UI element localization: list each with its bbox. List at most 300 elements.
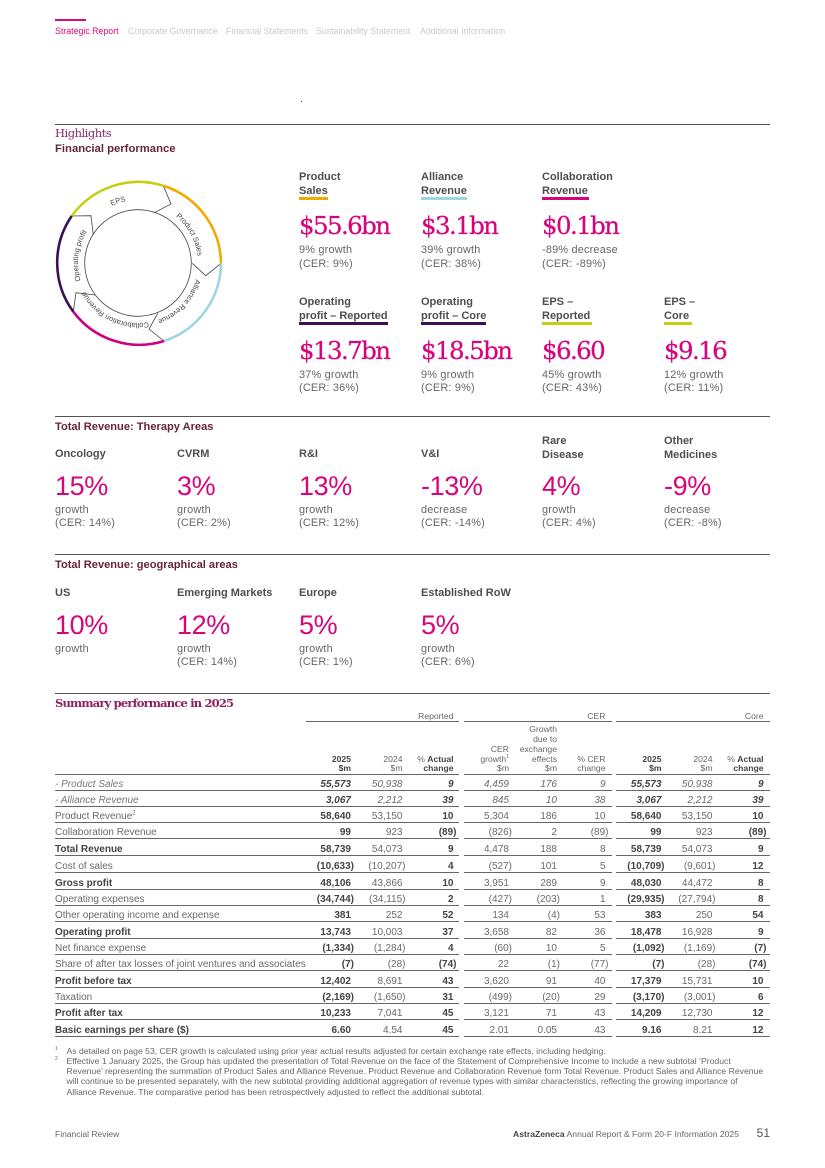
table row: product sales: 55,573 — [320, 779, 351, 790]
table row: product revenue: 53,150 — [682, 811, 712, 822]
column headers: effects — [532, 754, 557, 764]
table row: other operating income: 54 — [752, 910, 764, 921]
metric: eps core: EPS – — [664, 296, 695, 308]
table row: profit after tax: 14,209 — [631, 1008, 662, 1019]
footnote 2: 2 — [55, 1056, 58, 1062]
table row: net finance expense: (1,169) — [684, 943, 716, 954]
footnote 1: As detailed on page 53, CER growth is calculated using prior year actual results adjusted for certain exchange rate effects, including hedging. — [66, 1046, 606, 1056]
metric: other medicines: Medicines — [664, 449, 717, 461]
table row: taxation: (2,169) — [322, 992, 354, 1003]
table row: collaboration revenue: (826) — [489, 827, 512, 838]
metric: operating profit core: (CER: 9%) — [421, 382, 475, 394]
table row: share of losses: (1) — [548, 959, 560, 970]
metric: alliance revenue: (CER: 38%) — [421, 258, 481, 270]
metric: established row: Established RoW — [421, 587, 511, 599]
table row: total revenue: 9 — [758, 844, 764, 855]
metric: v&i: V&I — [421, 448, 439, 460]
table row: operating profit: 3,658 — [484, 927, 509, 938]
table row: product revenue: 5,304 — [484, 811, 509, 822]
table row: total revenue: 9 — [448, 844, 454, 855]
table row: alliance revenue: 39 — [752, 795, 764, 806]
table row: operating profit: 37 — [442, 927, 454, 938]
table row: total revenue: 58,739 — [631, 844, 662, 855]
table row: other operating income: 381 — [334, 910, 351, 921]
table row: total revenue: 4,478 — [484, 844, 509, 855]
table row: gross profit: 10 — [442, 878, 454, 889]
table row: profit before tax: 17,379 — [631, 976, 662, 987]
column headers: % Actual — [417, 754, 454, 764]
column headers: $m — [391, 763, 402, 773]
metric: europe: (CER: 1%) — [299, 656, 353, 668]
table row: product sales: 4,459 — [484, 779, 509, 790]
column headers: $m — [497, 763, 509, 773]
table row: product revenue: 10 — [442, 811, 454, 822]
table row: product sales: 176 — [540, 779, 557, 790]
metric: r&i: (CER: 12%) — [299, 517, 359, 529]
table row: total revenue: 58,739 — [320, 844, 351, 855]
metric: eps core: Core — [664, 310, 689, 322]
metric: oncology — [55, 448, 115, 529]
table header: summary performance in 2025 — [306, 711, 770, 773]
table row: operating profit: 82 — [546, 927, 557, 938]
metric: operating profit reported: 37% growth — [299, 368, 359, 380]
table row: net finance expense — [55, 938, 770, 955]
metric: other medicines — [664, 435, 722, 529]
table row: other operating income: 252 — [386, 910, 402, 921]
heading: therapy areas: Total Revenue: Therapy Areas — [55, 421, 213, 433]
table row: alliance revenue: 3,067 — [636, 795, 662, 806]
table row: profit after tax: 71 — [546, 1008, 557, 1019]
metric: established row: 5% — [421, 610, 459, 640]
table row: alliance revenue: - Alliance Revenue — [55, 795, 139, 806]
table row: collaboration revenue: Collaboration Revenue — [55, 827, 157, 838]
ring diagram: revenue and earnings cycle: Alliance Revenue — [158, 279, 200, 323]
heading: financial performance: Financial performance — [55, 143, 176, 155]
column headers: change — [423, 763, 454, 773]
table row: profit after tax: Profit after tax — [55, 1008, 123, 1019]
table row: profit before tax: 15,731 — [682, 976, 712, 987]
table row: other operating income: (4) — [548, 910, 560, 921]
metric: emerging markets: growth — [177, 642, 211, 654]
metric: eps reported — [542, 296, 604, 394]
table row: profit after tax: 45 — [442, 1008, 454, 1019]
table row: taxation: (1,650) — [374, 992, 406, 1003]
metric: collaboration revenue: (CER: -89%) — [542, 258, 606, 270]
metric: product sales: $55.6bn — [299, 211, 389, 240]
table row: product sales — [55, 774, 770, 791]
table row: alliance revenue: 10 — [546, 795, 557, 806]
table row: operating profit: 10,003 — [372, 927, 402, 938]
metric: collaboration revenue: Revenue — [542, 185, 588, 197]
metric: collaboration revenue: Collaboration — [542, 171, 613, 183]
table row: operating profit: 16,928 — [682, 927, 712, 938]
metric: established row: growth — [421, 642, 455, 654]
table row: product revenue: 58,640 — [320, 811, 351, 822]
table row: basic earnings per share — [55, 1019, 770, 1037]
table row: profit before tax: 12,402 — [320, 976, 351, 987]
table row: operating profit: 36 — [594, 927, 606, 938]
table row: basic earnings per share: 12 — [752, 1025, 764, 1036]
tab: corporate governance: Corporate Governance — [128, 26, 218, 36]
metric: v&i — [421, 448, 485, 529]
metric: operating profit core: profit – Core — [421, 310, 486, 322]
metric: product sales: 9% growth — [299, 244, 352, 256]
table row: share of losses: (77) — [591, 959, 608, 970]
table row: basic earnings per share: 4.54 — [383, 1025, 402, 1036]
table row: alliance revenue: 3,067 — [326, 795, 351, 806]
table row: basic earnings per share: 6.60 — [332, 1025, 351, 1036]
navigation bar — [55, 19, 505, 36]
table row: gross profit: 48,106 — [320, 878, 351, 889]
table row: taxation: (3,001) — [684, 992, 716, 1003]
table row: alliance revenue: 2,212 — [687, 795, 712, 806]
column headers: $m — [701, 763, 712, 773]
table row: operating expenses: (203) — [537, 894, 560, 905]
table row: net finance expense: 4 — [448, 943, 454, 954]
table row: other operating income: 52 — [442, 910, 454, 921]
metric: product sales: Product — [299, 171, 341, 183]
column headers: $m — [545, 763, 557, 773]
metric: alliance revenue: Alliance — [421, 171, 463, 183]
table row: share of losses: (74) — [749, 959, 766, 970]
table row: taxation: Taxation — [55, 992, 92, 1003]
metric: collaboration revenue: -89% decrease — [542, 244, 618, 256]
column headers: % Actual — [727, 754, 764, 764]
column headers: 2024 — [693, 754, 712, 764]
table row: collaboration revenue: (89) — [591, 827, 608, 838]
metric: oncology: Oncology — [55, 448, 106, 460]
metric: emerging markets — [177, 587, 272, 668]
table row: product sales: 55,573 — [631, 779, 662, 790]
table row: basic earnings per share: Basic earnings per share ($) — [55, 1025, 189, 1036]
table row: taxation: 29 — [594, 992, 606, 1003]
table row: collaboration revenue: 99 — [650, 827, 662, 838]
metric: emerging markets: Emerging Markets — [177, 587, 272, 599]
metric: operating profit core: 9% growth — [421, 368, 474, 380]
table row: net finance expense: (1,334) — [322, 943, 354, 954]
metric: europe: growth — [299, 642, 333, 654]
table row: product revenue — [55, 806, 770, 823]
metric: product sales: (CER: 9%) — [299, 258, 353, 270]
table row: basic earnings per share: 9.16 — [642, 1025, 662, 1036]
table row: share of losses: (28) — [698, 959, 716, 970]
table row: gross profit: Gross profit — [55, 878, 112, 889]
metric: operating profit reported: profit – Reported — [299, 310, 388, 322]
metric: oncology: growth — [55, 504, 89, 516]
table row: profit after tax — [55, 1003, 770, 1020]
tab: financial statements: Financial Statements — [226, 26, 308, 36]
table row: net finance expense: (7) — [754, 943, 766, 954]
table row: profit after tax: 43 — [594, 1008, 606, 1019]
metric: rare disease: 4% — [542, 471, 580, 501]
metric: eps reported: (CER: 43%) — [542, 382, 602, 394]
metric: v&i: -13% — [421, 471, 482, 501]
ring diagram: revenue and earnings cycle: Collaboration Revenue — [82, 292, 148, 328]
table row: gross profit: 8 — [758, 878, 764, 889]
table row: share of losses: (74) — [439, 959, 456, 970]
table row: operating expenses: (27,794) — [678, 894, 716, 905]
column headers: % CER — [577, 754, 606, 764]
table row: total revenue: Total Revenue — [55, 844, 123, 855]
table row: cost of sales: 4 — [448, 861, 454, 872]
metric: eps reported: Reported — [542, 310, 590, 322]
table row: total revenue: 54,073 — [682, 844, 712, 855]
footer: report title: AstraZeneca Annual Report & Form 20-F Information 2025 — [513, 1129, 739, 1139]
column headers: 2025 — [642, 754, 662, 764]
table row: share of losses: (28) — [388, 959, 406, 970]
metric: operating profit reported: (CER: 36%) — [299, 382, 359, 394]
table row: operating profit: Operating profit — [55, 927, 131, 938]
table row: share of losses: 22 — [498, 959, 509, 970]
metric: collaboration revenue: $0.1bn — [542, 211, 618, 240]
metric: eps core — [664, 296, 726, 394]
metric: other medicines: Other — [664, 435, 693, 447]
metric: established row — [421, 587, 511, 668]
table row: profit before tax: 3,620 — [484, 976, 509, 987]
table row: operating expenses: 1 — [600, 894, 606, 905]
metric: eps reported: EPS – — [542, 296, 573, 308]
column headers: exchange — [520, 744, 557, 754]
metric: rare disease: Disease — [542, 449, 584, 461]
metric: product sales — [299, 171, 390, 270]
table row: net finance expense: 10 — [546, 943, 557, 954]
footnote 2: will continue to be presented separately, with the new subtotal providing additional aggregation of revenue types with similar characteristics, reflecting the growing importance of — [66, 1076, 738, 1086]
group header: cer: CER — [587, 711, 606, 721]
metric: cvrm: growth — [177, 504, 211, 516]
table row: gross profit: 44,472 — [682, 878, 712, 889]
column headers: 2025 — [332, 754, 351, 764]
table row: collaboration revenue: 99 — [340, 827, 351, 838]
table row: product revenue: 58,640 — [631, 811, 662, 822]
metric: oncology: 15% — [55, 471, 108, 501]
metric: other medicines: decrease — [664, 504, 710, 516]
table row: operating expenses: 8 — [758, 894, 764, 905]
column headers: change — [733, 763, 764, 773]
table row: profit before tax: 10 — [752, 976, 764, 987]
table row: gross profit: 48,030 — [631, 878, 662, 889]
metric: operating profit reported: $13.7bn — [299, 336, 389, 365]
metric: us: growth — [55, 642, 89, 654]
table row: basic earnings per share: 45 — [442, 1025, 454, 1036]
column headers: Growth — [529, 724, 557, 734]
table row: taxation: (3,170) — [633, 992, 664, 1003]
table row: other operating income: 53 — [594, 910, 606, 921]
table row: net finance expense: Net finance expense — [55, 943, 146, 954]
table row: operating profit: 9 — [758, 927, 764, 938]
metric: r&i: 13% — [299, 471, 352, 501]
table row: operating profit — [55, 921, 770, 939]
table row: share of losses: (7) — [342, 959, 354, 970]
table row: profit before tax: 40 — [594, 976, 606, 987]
footnote 2 — [55, 1056, 763, 1097]
table row: product revenue: 53,150 — [372, 811, 402, 822]
table row: total revenue: 188 — [540, 844, 557, 855]
table row: product sales: 50,938 — [372, 779, 402, 790]
metric: eps core: (CER: 11%) — [664, 382, 723, 394]
table row: basic earnings per share: 8.21 — [693, 1025, 712, 1036]
table row: product sales: 9 — [758, 779, 764, 790]
table row: gross profit: 9 — [600, 878, 606, 889]
table row: taxation: (20) — [542, 992, 560, 1003]
table row: operating expenses: (427) — [489, 894, 512, 905]
heading: geographical areas: Total Revenue: geographical areas — [55, 559, 238, 571]
table row: collaboration revenue: 923 — [696, 827, 712, 838]
footnote 2: Alliance Revenue. The comparative period has been retrospectively adjusted to reflect the additional subtotal. — [66, 1087, 484, 1097]
column headers: CER — [491, 744, 509, 754]
metric: cvrm: CVRM — [177, 448, 209, 460]
table row: collaboration revenue: (89) — [439, 827, 456, 838]
metric: emerging markets: 12% — [177, 610, 230, 640]
metric: alliance revenue: $3.1bn — [421, 211, 497, 240]
metric: operating profit reported: Operating — [299, 296, 351, 308]
group header: reported: Reported — [418, 711, 454, 721]
column headers: $m — [649, 763, 662, 773]
table row: cost of sales — [55, 855, 770, 873]
table row: other operating income: Other operating income and expense — [55, 910, 220, 921]
table row: product sales: - Product Sales — [55, 779, 123, 790]
table row: operating expenses: (34,115) — [369, 894, 406, 905]
footnote 2: Revenue’ representing the summation of Product Sales and Alliance Revenue. Product Revenue and Collaboration Revenue form Total Revenue. Product Sales and Alliance Revenue — [66, 1066, 763, 1076]
column headers — [332, 724, 764, 773]
metric: rare disease: Rare — [542, 435, 566, 447]
metric: oncology: (CER: 14%) — [55, 517, 115, 529]
table row: operating expenses: Operating expenses — [55, 894, 145, 905]
metric: rare disease — [542, 435, 596, 529]
metric: collaboration revenue — [542, 171, 620, 270]
table row: total revenue: 8 — [600, 844, 606, 855]
table row: product sales: 50,938 — [682, 779, 712, 790]
metric: emerging markets: (CER: 14%) — [177, 656, 237, 668]
column headers: $m — [339, 763, 351, 773]
table row: profit before tax: 8,691 — [377, 976, 402, 987]
table row: cost of sales: 12 — [752, 861, 764, 872]
table row: profit after tax: 3,121 — [484, 1008, 509, 1019]
table row: profit after tax: 10,233 — [320, 1008, 351, 1019]
table row: other operating income: 134 — [492, 910, 509, 921]
table row: alliance revenue: 39 — [442, 795, 454, 806]
table row: collaboration revenue: 2 — [551, 827, 557, 838]
metric: r&i: R&I — [299, 448, 318, 460]
table row: other operating income: 383 — [645, 910, 662, 921]
table row: profit before tax — [55, 970, 770, 988]
table row: operating profit: 18,478 — [631, 927, 662, 938]
column headers: due to — [533, 734, 557, 744]
table row: total revenue: 54,073 — [372, 844, 402, 855]
heading: highlights: Highlights — [55, 126, 111, 140]
table row: collaboration revenue — [55, 822, 770, 839]
table row: gross profit: 43,866 — [372, 878, 402, 889]
table row: alliance revenue — [55, 790, 770, 807]
metric: operating profit core: Operating — [421, 296, 473, 308]
table row: operating expenses: 2 — [448, 894, 454, 905]
metric: other medicines: -9% — [664, 471, 711, 501]
column headers: change — [577, 763, 606, 773]
table row: product revenue: Product Revenue2 — [55, 811, 136, 822]
table row: net finance expense: 5 — [600, 943, 606, 954]
ring diagram: revenue and earnings cycle: Operating profit — [72, 230, 87, 282]
table row: cost of sales: (9,601) — [684, 861, 716, 872]
metric: other medicines: (CER: -8%) — [664, 517, 722, 529]
metric: alliance revenue — [421, 171, 498, 270]
table row: profit before tax: 43 — [442, 976, 454, 987]
table row: cost of sales: (10,633) — [317, 861, 354, 872]
table row: gross profit: 289 — [540, 878, 557, 889]
table row: profit before tax: Profit before tax — [55, 976, 132, 987]
table row: total revenue — [55, 838, 770, 856]
active tab marker — [55, 19, 86, 21]
footnotes — [55, 1046, 763, 1097]
metric: us: US — [55, 587, 70, 599]
metric: us — [55, 587, 108, 654]
footer: section name: Financial Review — [55, 1129, 119, 1139]
table row: alliance revenue: 38 — [594, 795, 606, 806]
metric: eps reported: $6.60 — [542, 336, 604, 365]
table row: cost of sales: 5 — [600, 861, 606, 872]
metric: alliance revenue: Revenue — [421, 185, 467, 197]
table row: alliance revenue: 845 — [492, 795, 509, 806]
footnote 2: Effective 1 January 2025, the Group has updated the presentation of Total Revenue on the face of the Statement of Comprehensive Income to include a new subtotal ‘Product — [66, 1056, 731, 1066]
metric: v&i: decrease — [421, 504, 467, 516]
table row: product sales: 9 — [600, 779, 606, 790]
table row: product sales: 9 — [448, 779, 454, 790]
table row: net finance expense: (1,284) — [374, 943, 406, 954]
metric: operating profit core: $18.5bn — [421, 336, 511, 365]
table row: product revenue: 10 — [752, 811, 764, 822]
metric: r&i: growth — [299, 504, 333, 516]
table row: cost of sales: 101 — [540, 861, 557, 872]
ring diagram: revenue and earnings cycle: EPS — [110, 196, 126, 206]
table row: cost of sales: (527) — [489, 861, 512, 872]
footnote 1: 1 — [55, 1046, 58, 1052]
table row: profit after tax: 12,730 — [682, 1008, 712, 1019]
metric: us: 10% — [55, 610, 108, 640]
metric: rare disease: (CER: 4%) — [542, 517, 596, 529]
heading: summary performance: Summary performance in 2025 — [55, 696, 233, 710]
table row: collaboration revenue: (89) — [749, 827, 766, 838]
group header: core: Core — [745, 711, 764, 721]
metric: europe: Europe — [299, 587, 337, 599]
metric: cvrm — [177, 448, 231, 529]
table row: cost of sales: (10,207) — [368, 861, 406, 872]
table row: gross profit — [55, 872, 770, 890]
table row: taxation: 31 — [442, 992, 454, 1003]
table row: share of losses: (7) — [652, 959, 664, 970]
table row: operating expenses: (34,744) — [317, 894, 354, 905]
table row: operating expenses — [55, 889, 770, 906]
metric: cvrm: 3% — [177, 471, 215, 501]
column headers: growth1 — [480, 754, 509, 764]
table row: basic earnings per share: 43 — [594, 1025, 606, 1036]
table row: other operating income: 250 — [696, 910, 712, 921]
table row: other operating income — [55, 905, 770, 922]
metric: rare disease: growth — [542, 504, 576, 516]
ring diagram: revenue and earnings cycle: Product Sales — [176, 213, 202, 256]
table row: product revenue: 10 — [594, 811, 606, 822]
metric: europe — [299, 587, 353, 668]
table row: operating profit: 13,743 — [320, 927, 351, 938]
table row: profit after tax: 7,041 — [377, 1008, 402, 1019]
table row: profit before tax: 91 — [546, 976, 557, 987]
metric: eps core: 12% growth — [664, 368, 724, 380]
table row: taxation — [55, 987, 770, 1004]
table row: taxation: (499) — [489, 992, 512, 1003]
table row: share of losses: Share of after tax losses of joint ventures and associates — [55, 959, 306, 970]
table row: collaboration revenue: 923 — [386, 827, 402, 838]
tab: strategic report: Strategic Report — [55, 26, 119, 36]
metric: operating profit core — [421, 296, 512, 394]
column headers: 2024 — [383, 754, 402, 764]
metric: operating profit reported — [299, 296, 390, 394]
